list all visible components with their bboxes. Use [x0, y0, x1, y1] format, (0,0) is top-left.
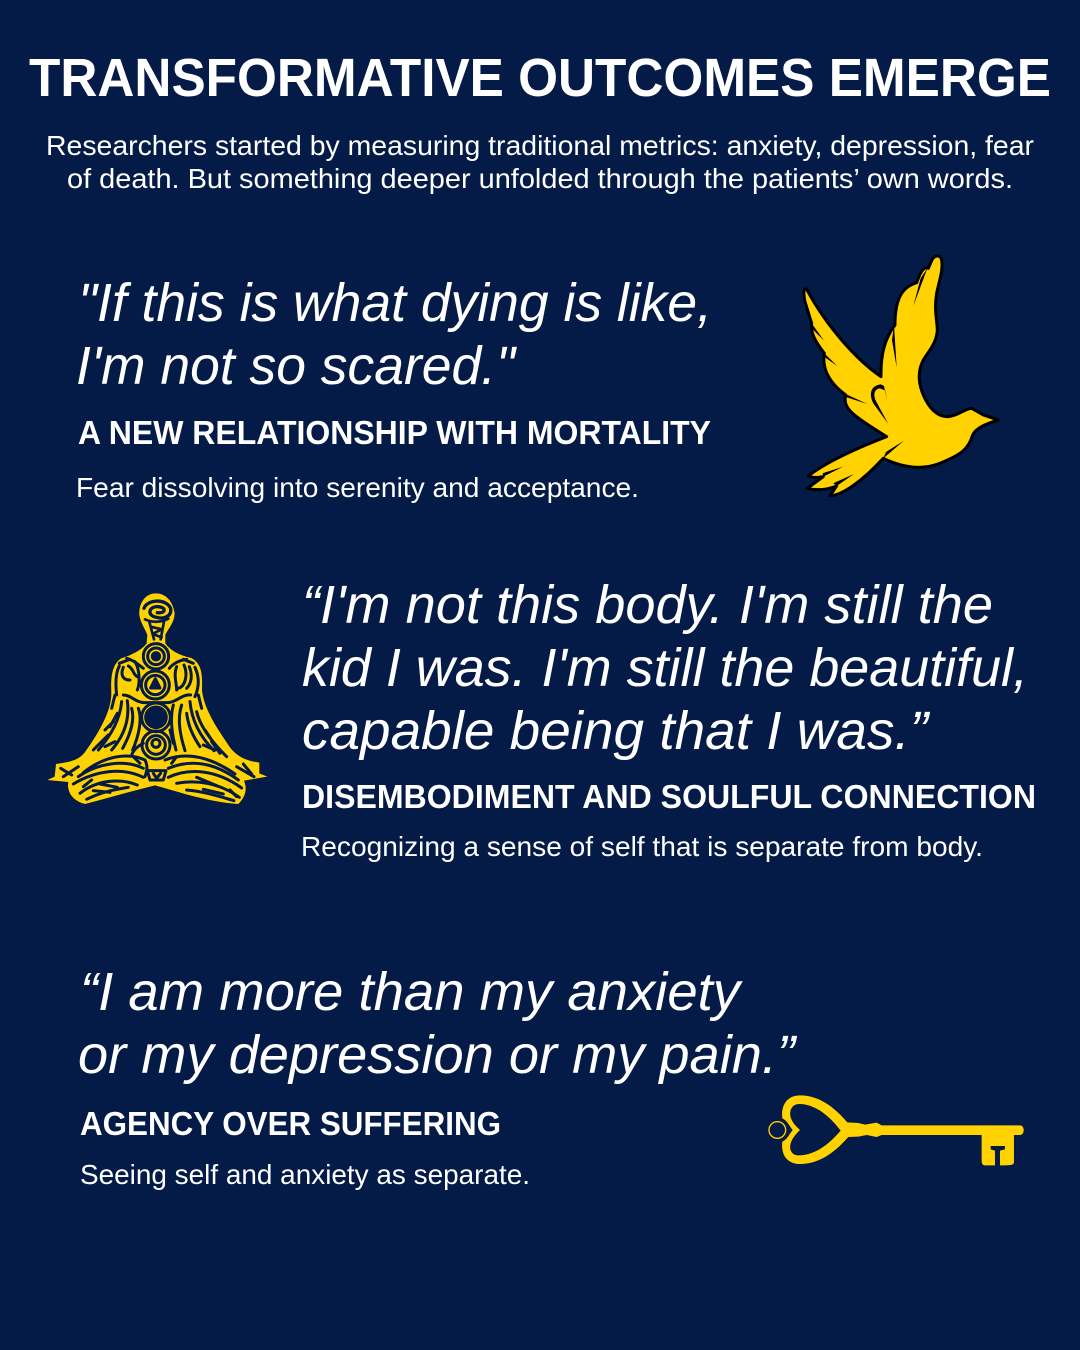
quote: more than my anxiety: “I am more than my anxiety: [80, 962, 743, 1022]
chakra circles: [141, 644, 170, 780]
description: sense of self: Recognizing a sense of self that is separate from body.: [301, 831, 983, 862]
figure silhouette: [47, 593, 267, 804]
title: TRANSFORMATIVE OUTCOMES EMERGE: [29, 48, 1051, 108]
description: serenity: Fear dissolving into serenity and acceptance.: [76, 472, 639, 503]
quote: not this body: capable being that I was.”: [302, 701, 930, 761]
body and leg contours: [61, 658, 254, 801]
quote: if this is what dying is like: [76, 273, 712, 396]
icon: dove: [804, 256, 998, 496]
panel: new relationship with mortality: [76, 256, 998, 503]
quote: not this body: [302, 575, 1028, 761]
icon: meditating figure with chakras: [47, 593, 267, 804]
quote: more than my anxiety: or my depression or my pain.”: [78, 1025, 797, 1085]
quote: more than my anxiety: [78, 962, 797, 1085]
intro text: [46, 130, 1034, 194]
description: self and anxiety: Seeing self and anxiety as separate.: [80, 1159, 530, 1190]
dove feather lines: [812, 268, 927, 486]
intro text: of death. But something deeper unfolded through the patients’ own words.: [67, 163, 1013, 194]
head detail: [144, 601, 171, 618]
icon: heart key: [769, 1095, 1024, 1165]
panel: agency over suffering: [78, 962, 1024, 1190]
intro text: Researchers started by measuring traditional metrics: anxiety, depression, fear: [46, 130, 1034, 161]
key body: [782, 1095, 1024, 1165]
panel: disembodiment: [47, 575, 1036, 862]
heading: agency: AGENCY OVER SUFFERING: [80, 1105, 501, 1142]
heading: disembodiment: DISEMBODIMENT AND SOULFUL CONNECTION: [302, 778, 1036, 815]
key ring: [769, 1122, 786, 1138]
heading: mortality: A NEW RELATIONSHIP WITH MORTALITY: [78, 414, 711, 451]
quote: not this body: kid I was. I'm still the beautiful,: [302, 638, 1028, 698]
quote: if this is what dying is like: "If this is what dying is like,: [78, 273, 712, 333]
quote: if this is what dying is like: I'm not so scared.": [76, 336, 518, 396]
quote: not this body: “I'm not this body. I'm still the: [302, 575, 993, 635]
